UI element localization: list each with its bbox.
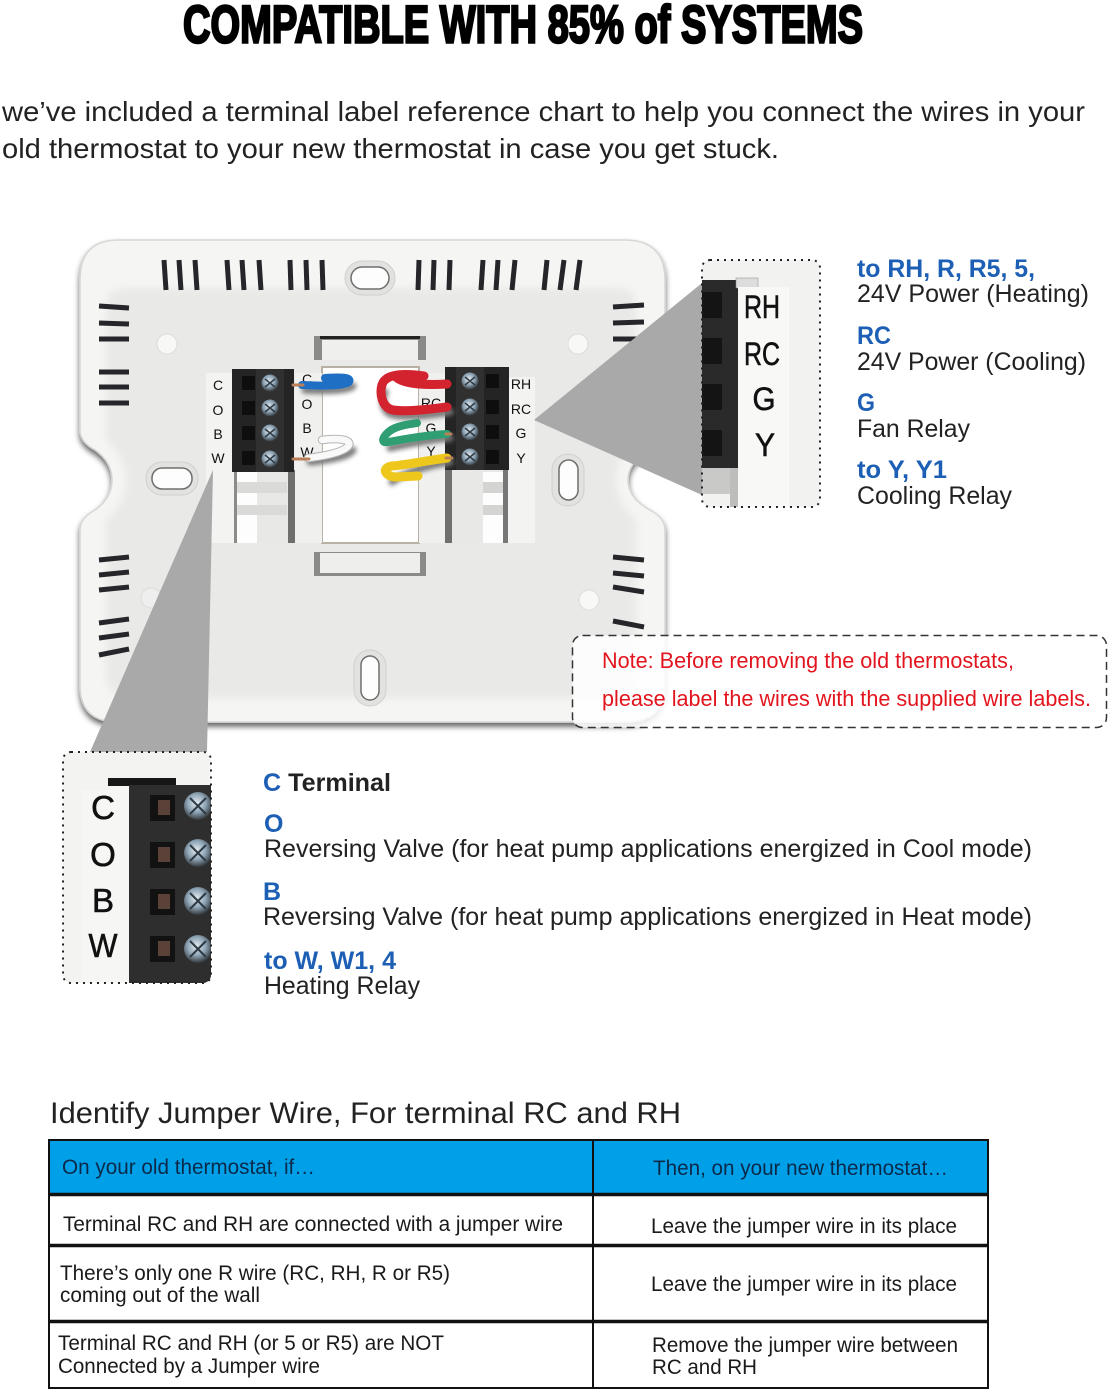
red jumper wire (381, 375, 447, 411)
table header (49, 1140, 988, 1194)
terminal letters: RC (511, 401, 531, 417)
terminal letters: G (426, 420, 436, 436)
table row 3 (58, 1332, 958, 1379)
terminal letters: W (211, 450, 225, 466)
inset: left terminal close-up: O (90, 836, 116, 873)
table row 1 (63, 1213, 957, 1238)
callout beam: left terminals (90, 470, 213, 752)
left terminal descriptions: Heating Relay (264, 972, 420, 1000)
right terminal descriptions: G (857, 389, 875, 417)
terminal letters: O (302, 396, 313, 412)
table row 3: Terminal RC and RH (or 5 or R5) are NOT (58, 1332, 444, 1355)
table row 3: RC and RH (652, 1356, 757, 1379)
side vents (99, 305, 644, 655)
jumper wire heading: Identify Jumper Wire, For terminal RC and RH (50, 1097, 681, 1130)
wires (293, 375, 452, 482)
inset: left terminal close-up: B (92, 882, 114, 919)
table row 1: Leave the jumper wire in its place (651, 1215, 957, 1238)
right terminal descriptions (857, 255, 1089, 510)
inset: right terminal close-up (702, 260, 820, 507)
inset: right terminal close-up: RH (744, 289, 780, 325)
terminal letters: B (213, 426, 223, 442)
jumper wire table: On your old thermostat, if… (62, 1156, 315, 1179)
intro paragraph: old thermostat to your new thermostat in case you get stuck. (2, 133, 779, 164)
thermostat back plate (80, 240, 665, 722)
left terminal descriptions: C Terminal (263, 769, 391, 797)
table row 3: Remove the jumper wire between (652, 1334, 958, 1357)
wire shadows (305, 386, 450, 482)
inset: right terminal close-up: Y (755, 427, 775, 463)
right terminal strips (419, 373, 535, 543)
pegs (141, 334, 599, 610)
right terminal descriptions: RC (857, 322, 891, 350)
terminal letters: RC (421, 395, 441, 411)
right terminal descriptions: to Y, Y1 (857, 456, 947, 484)
table row 2: Leave the jumper wire in its place (651, 1273, 957, 1296)
inset: left terminal close-up: C (91, 789, 115, 826)
left terminal strips (206, 373, 322, 543)
terminal letters: B (302, 420, 312, 436)
table row 2: coming out of the wall (60, 1284, 260, 1307)
terminal letters: Y (516, 450, 526, 466)
right terminal descriptions: Cooling Relay (857, 482, 1012, 510)
inset: right terminal close-up: G (752, 381, 776, 417)
callout beam: right terminals (534, 283, 702, 495)
table row 2 (60, 1262, 957, 1307)
bottom clip (314, 552, 426, 576)
top clip (314, 336, 426, 360)
center opening (322, 367, 419, 543)
terminal letters: C (213, 377, 223, 393)
table row 2: There’s only one R wire (RC, RH, R or R5) (60, 1262, 450, 1285)
terminal letters: W (300, 444, 314, 460)
note box: Note: Before removing the old thermostats, (602, 648, 1014, 673)
right terminal block (445, 367, 509, 470)
terminal letters: Y (426, 443, 436, 459)
inset: left terminal close-up: W (88, 927, 118, 964)
left terminal descriptions: to W, W1, 4 (264, 947, 396, 975)
terminal letters: O (213, 402, 224, 418)
left terminal descriptions: O (264, 810, 283, 838)
left terminal descriptions (263, 769, 1032, 1000)
left terminal descriptions: Reversing Valve (for heat pump applications energized in Cool mode) (264, 835, 1032, 863)
jumper wire table (49, 1140, 988, 1388)
right terminal descriptions: to RH, R, R5, 5, (857, 255, 1035, 283)
table row 1: Terminal RC and RH are connected with a jumper wire (63, 1213, 563, 1236)
terminal letters (211, 371, 531, 466)
note box: please label the wires with the supplied wire labels. (602, 686, 1091, 711)
left terminal descriptions: B (263, 878, 281, 906)
terminal letters: RH (511, 376, 531, 392)
inset: right terminal close-up: RC (744, 336, 780, 372)
right terminal descriptions: 24V Power (Cooling) (857, 348, 1086, 376)
intro paragraph: we’ve included a terminal label reference chart to help you connect the wires in your (1, 96, 1085, 127)
note box (572, 636, 1106, 728)
mounting holes (146, 261, 584, 706)
blue wire (302, 377, 349, 386)
yellow wire (385, 458, 447, 477)
right terminal descriptions: 24V Power (Heating) (857, 280, 1089, 308)
left terminal descriptions: Reversing Valve (for heat pump applications energized in Heat mode) (263, 903, 1032, 931)
plate body (80, 240, 665, 722)
top vents (164, 260, 580, 290)
table row 3: Connected by a Jumper wire (58, 1355, 320, 1378)
green wire (383, 423, 447, 442)
inset: left terminal close-up (63, 752, 212, 983)
left terminal block (232, 369, 294, 472)
terminal letters: C (302, 371, 312, 387)
jumper wire table: Then, on your new thermostat… (653, 1157, 948, 1180)
white wire (308, 439, 349, 458)
terminal letters: G (516, 425, 526, 441)
intro paragraph (1, 96, 1085, 164)
right terminal descriptions: Fan Relay (857, 415, 970, 443)
